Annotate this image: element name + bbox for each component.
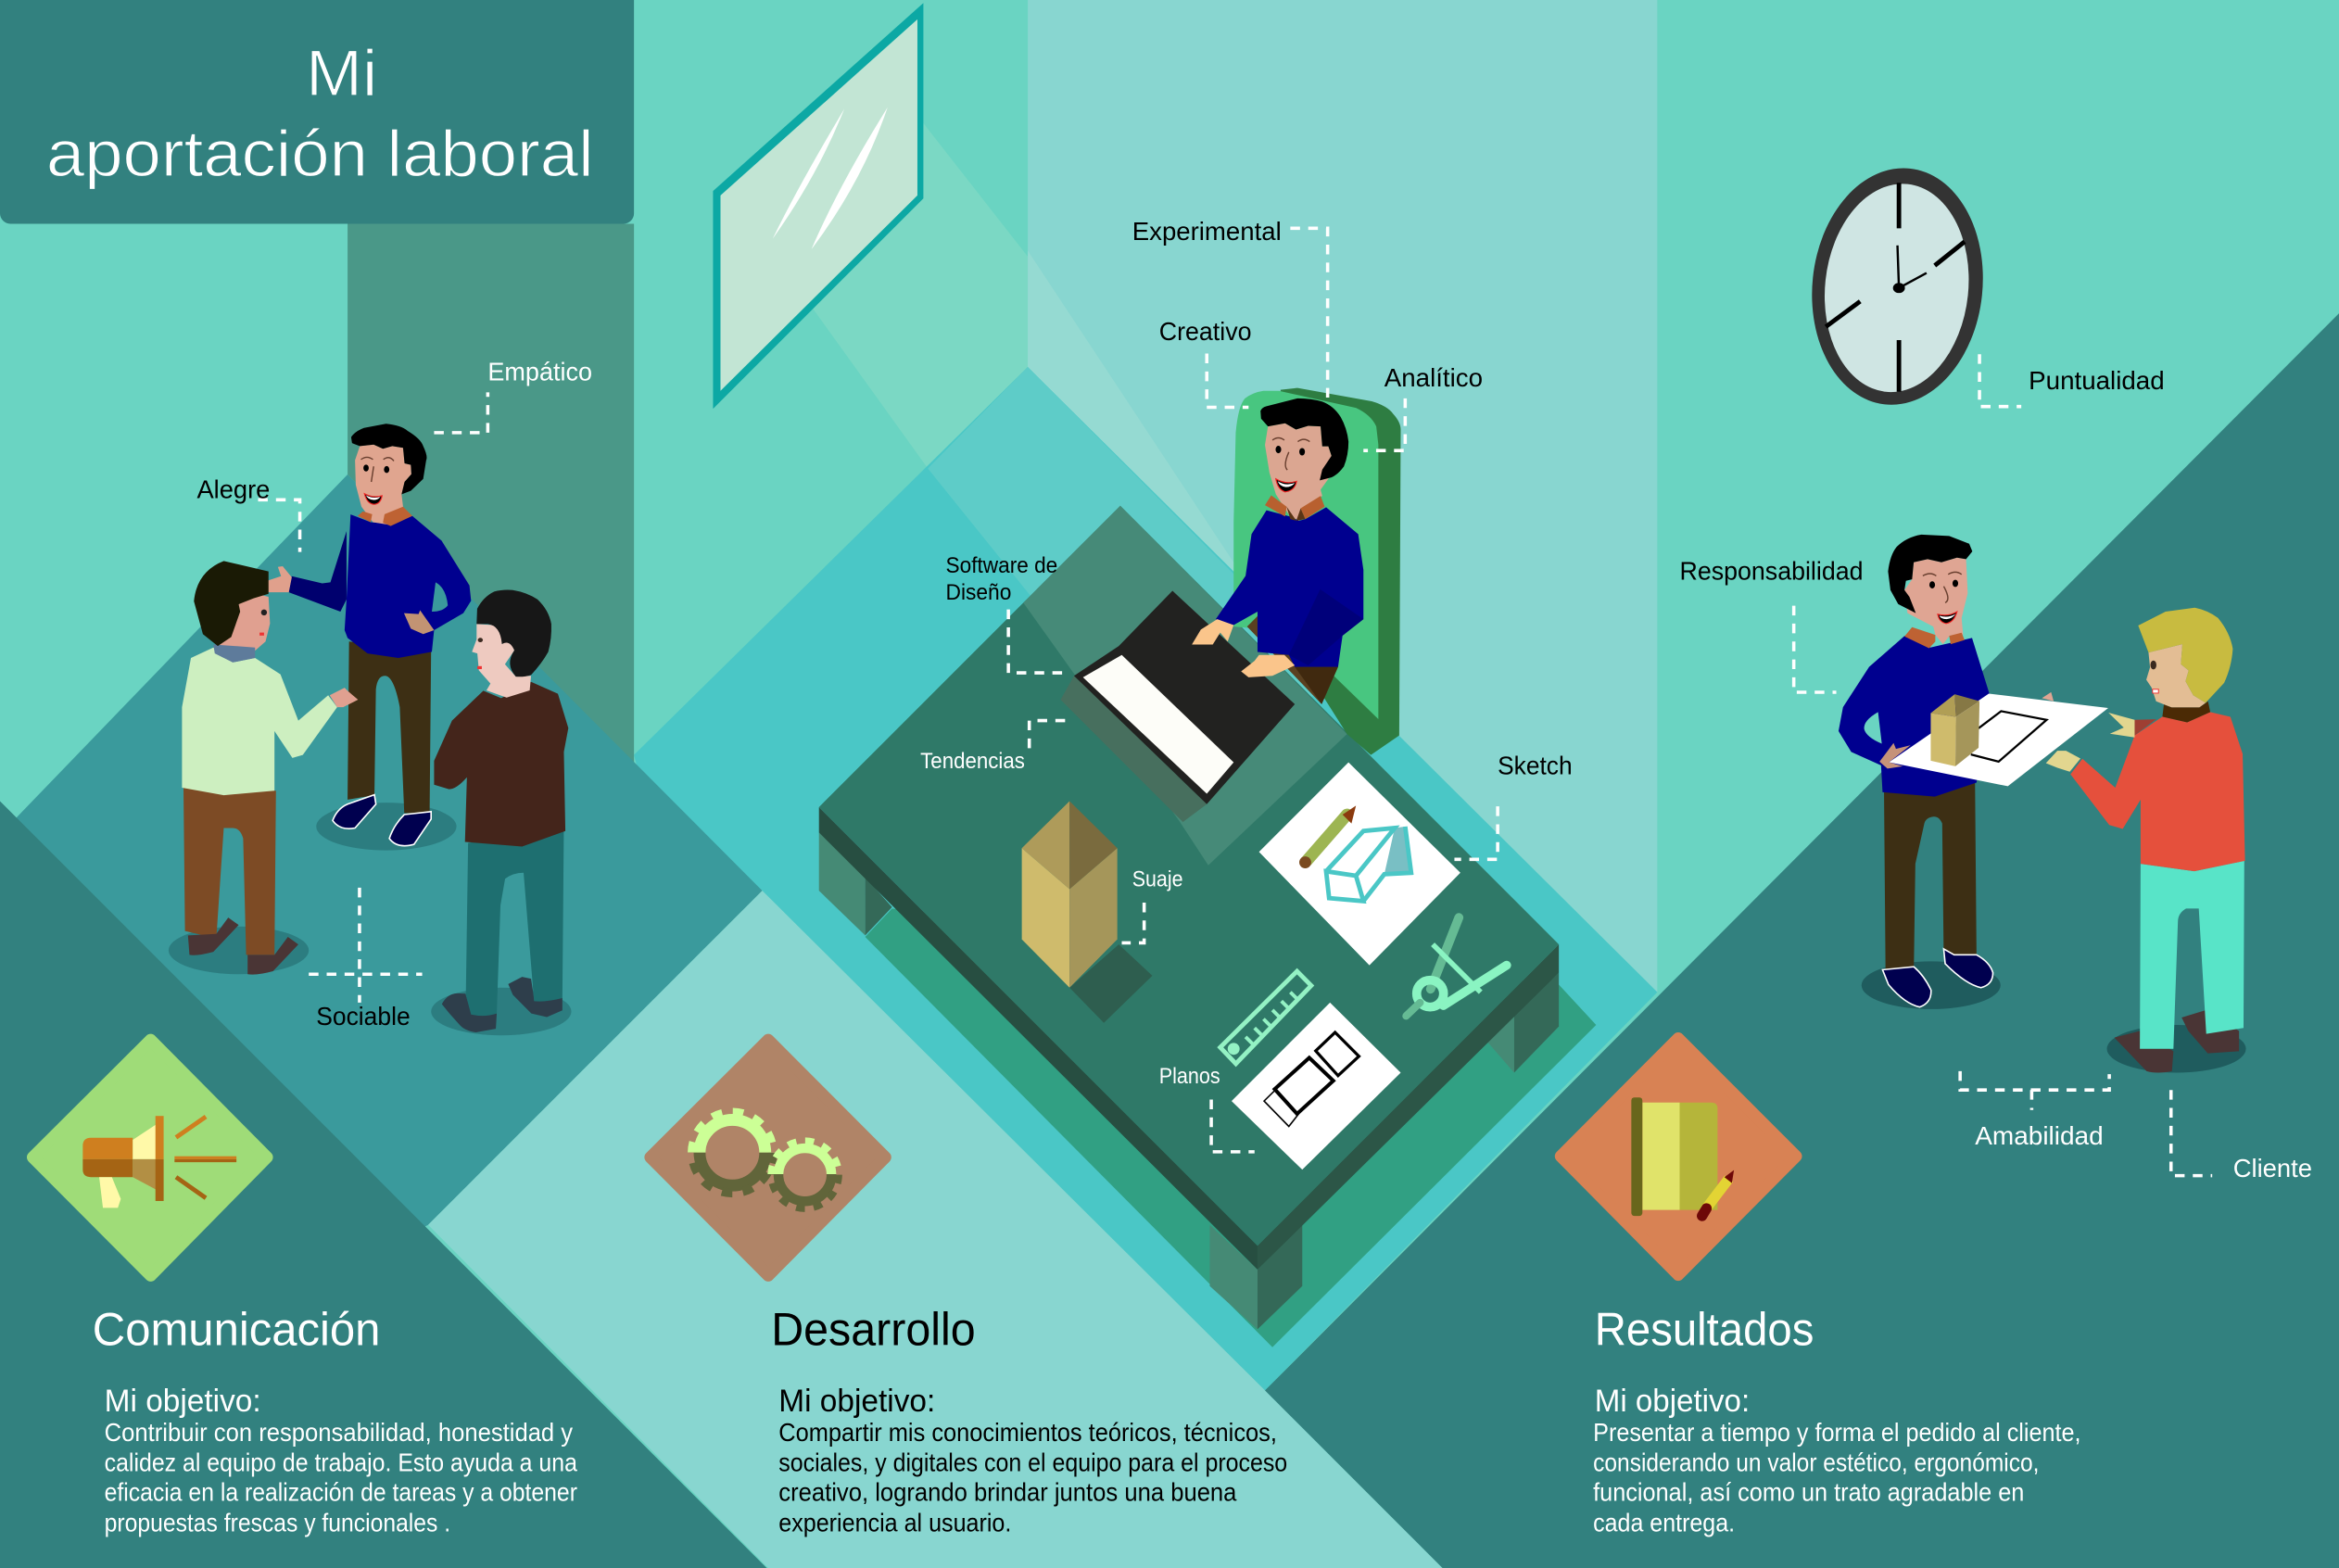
objective text: experiencia al usuario. [778,1508,1011,1537]
icon: drafting compass [1406,917,1507,1016]
callout: Sketch: Sketch [1498,752,1573,780]
dark left wall [348,223,634,764]
icon: gears on brown diamond [651,1040,885,1275]
icon: notebook and pencil on orange diamond [1561,1038,1796,1275]
callout: Experimental [1132,217,1328,398]
section: Desarrollo [651,1040,1287,1537]
callout: Amabilidad: Amabilidad [1975,1121,2104,1150]
callout: Software de Diseño [946,553,1068,673]
callout: Analítico: Analítico [1384,363,1483,392]
callout: Puntualidad [1979,354,2165,407]
icon: suaje box [1022,802,1152,1023]
figure: man in brown sweater [431,590,572,1035]
callout: Puntualidad: Puntualidad [2029,366,2165,395]
light ray on left wall [805,120,1028,469]
desk legs [819,832,1559,1329]
callout: Tendencias [920,721,1065,774]
objective text: Contribuir con responsabilidad, honestidad y [105,1417,574,1447]
callout: Amabilidad [1960,1071,2109,1150]
icon: laptop [1060,591,1295,822]
sheet with plan [1889,693,2108,786]
section: Resultados [1561,1038,2081,1537]
callout: Responsabilidad: Responsabilidad [1680,556,1864,585]
objective text: calidez al equipo de trabajo. Esto ayuda a una [105,1447,577,1476]
callout: Creativo [1159,317,1252,408]
model box [1930,694,1979,766]
callout: Empático [434,358,592,433]
illustration: desk scene [819,388,1596,1347]
callout: Sociable [309,888,423,1031]
callout: Analítico [1363,363,1483,450]
lower-left dark area [0,802,766,1568]
callout: Tendencias: Tendencias [920,749,1025,774]
seated man's hands on laptop [1192,619,1295,677]
objective text: Mi objetivo: [1595,1384,1750,1419]
objective text: funcional, así como un trato agradable en [1593,1477,2024,1507]
icon: megaphone on green diamond [32,1040,267,1275]
icon: plan sheet [1232,1003,1401,1170]
objective text: creativo, logrando brindar juntos una buena [778,1477,1237,1507]
heading: Resultados [1595,1303,1814,1355]
figure: group of three colleagues [169,424,572,1035]
callout: Software de Diseño: Diseño [946,580,1011,605]
objective text: eficacia en la realización de tareas y a obtener [105,1477,577,1507]
callout: Alegre: Alegre [196,475,270,504]
objective text [1593,1384,2081,1537]
chair [1233,388,1401,755]
title panel: Mi [306,37,377,110]
objective text: Compartir mis conocimientos teóricos, técnicos, [778,1417,1277,1447]
callout: Cliente [2171,1090,2312,1182]
heading: Comunicación [93,1303,380,1355]
lower-center light floor [428,891,1443,1568]
section: Comunicación [32,1040,577,1537]
figure: seated man [1216,398,1363,704]
heading: Desarrollo [771,1303,976,1355]
callout: Planos [1159,1064,1255,1152]
objective text: Mi objetivo: [778,1384,935,1419]
callout: Suaje: Suaje [1132,866,1182,891]
icon: ruler [1220,971,1311,1064]
center wall [1028,0,1657,993]
callout: Planos: Planos [1159,1064,1220,1089]
callout: Suaje [1121,866,1182,942]
light ray on center wall [1028,250,1236,575]
objective text: propuestas frescas y funcionales . [105,1508,450,1537]
objective text: cada entrega. [1593,1508,1735,1537]
callout: Alegre [196,475,300,552]
callout: Sketch [1454,752,1573,859]
left floor [0,474,763,1238]
callout: Cliente: Cliente [2233,1154,2312,1182]
figure: man in cream sweater [169,561,358,975]
desk top [819,506,1559,1270]
icon: window [713,3,923,409]
title panel [0,0,634,223]
center floor [634,367,1657,1390]
callout: Empático: Empático [487,358,592,386]
right dark floor [1265,313,2339,1568]
floor shadow under desk [866,908,1596,1347]
icon: sketch sheet [1259,763,1460,966]
callout: Experimental: Experimental [1132,217,1282,246]
callout: Sociable: Sociable [316,1002,411,1031]
objective text [105,1384,577,1537]
icon: wall clock [1801,159,1994,413]
figure: man in blue sweater [267,424,471,851]
objective text [778,1384,1287,1537]
objective text: Presentar a tiempo y forma el pedido al cliente, [1593,1417,2081,1447]
objective text: considerando un valor estético, ergonómico, [1593,1447,2039,1476]
figure: client in red sweater [2046,608,2246,1073]
callout: Software de Diseño: Software de [946,553,1057,578]
light ray on floor [928,367,1343,761]
objective text: Mi objetivo: [105,1384,261,1419]
figure: designer presenting model [1839,535,2108,1009]
callout: Responsabilidad [1680,556,1864,692]
title panel: aportación laboral [46,118,594,191]
objective text: sociales, y digitales con el equipo para el proceso [778,1447,1287,1476]
callout: Creativo: Creativo [1159,317,1252,346]
